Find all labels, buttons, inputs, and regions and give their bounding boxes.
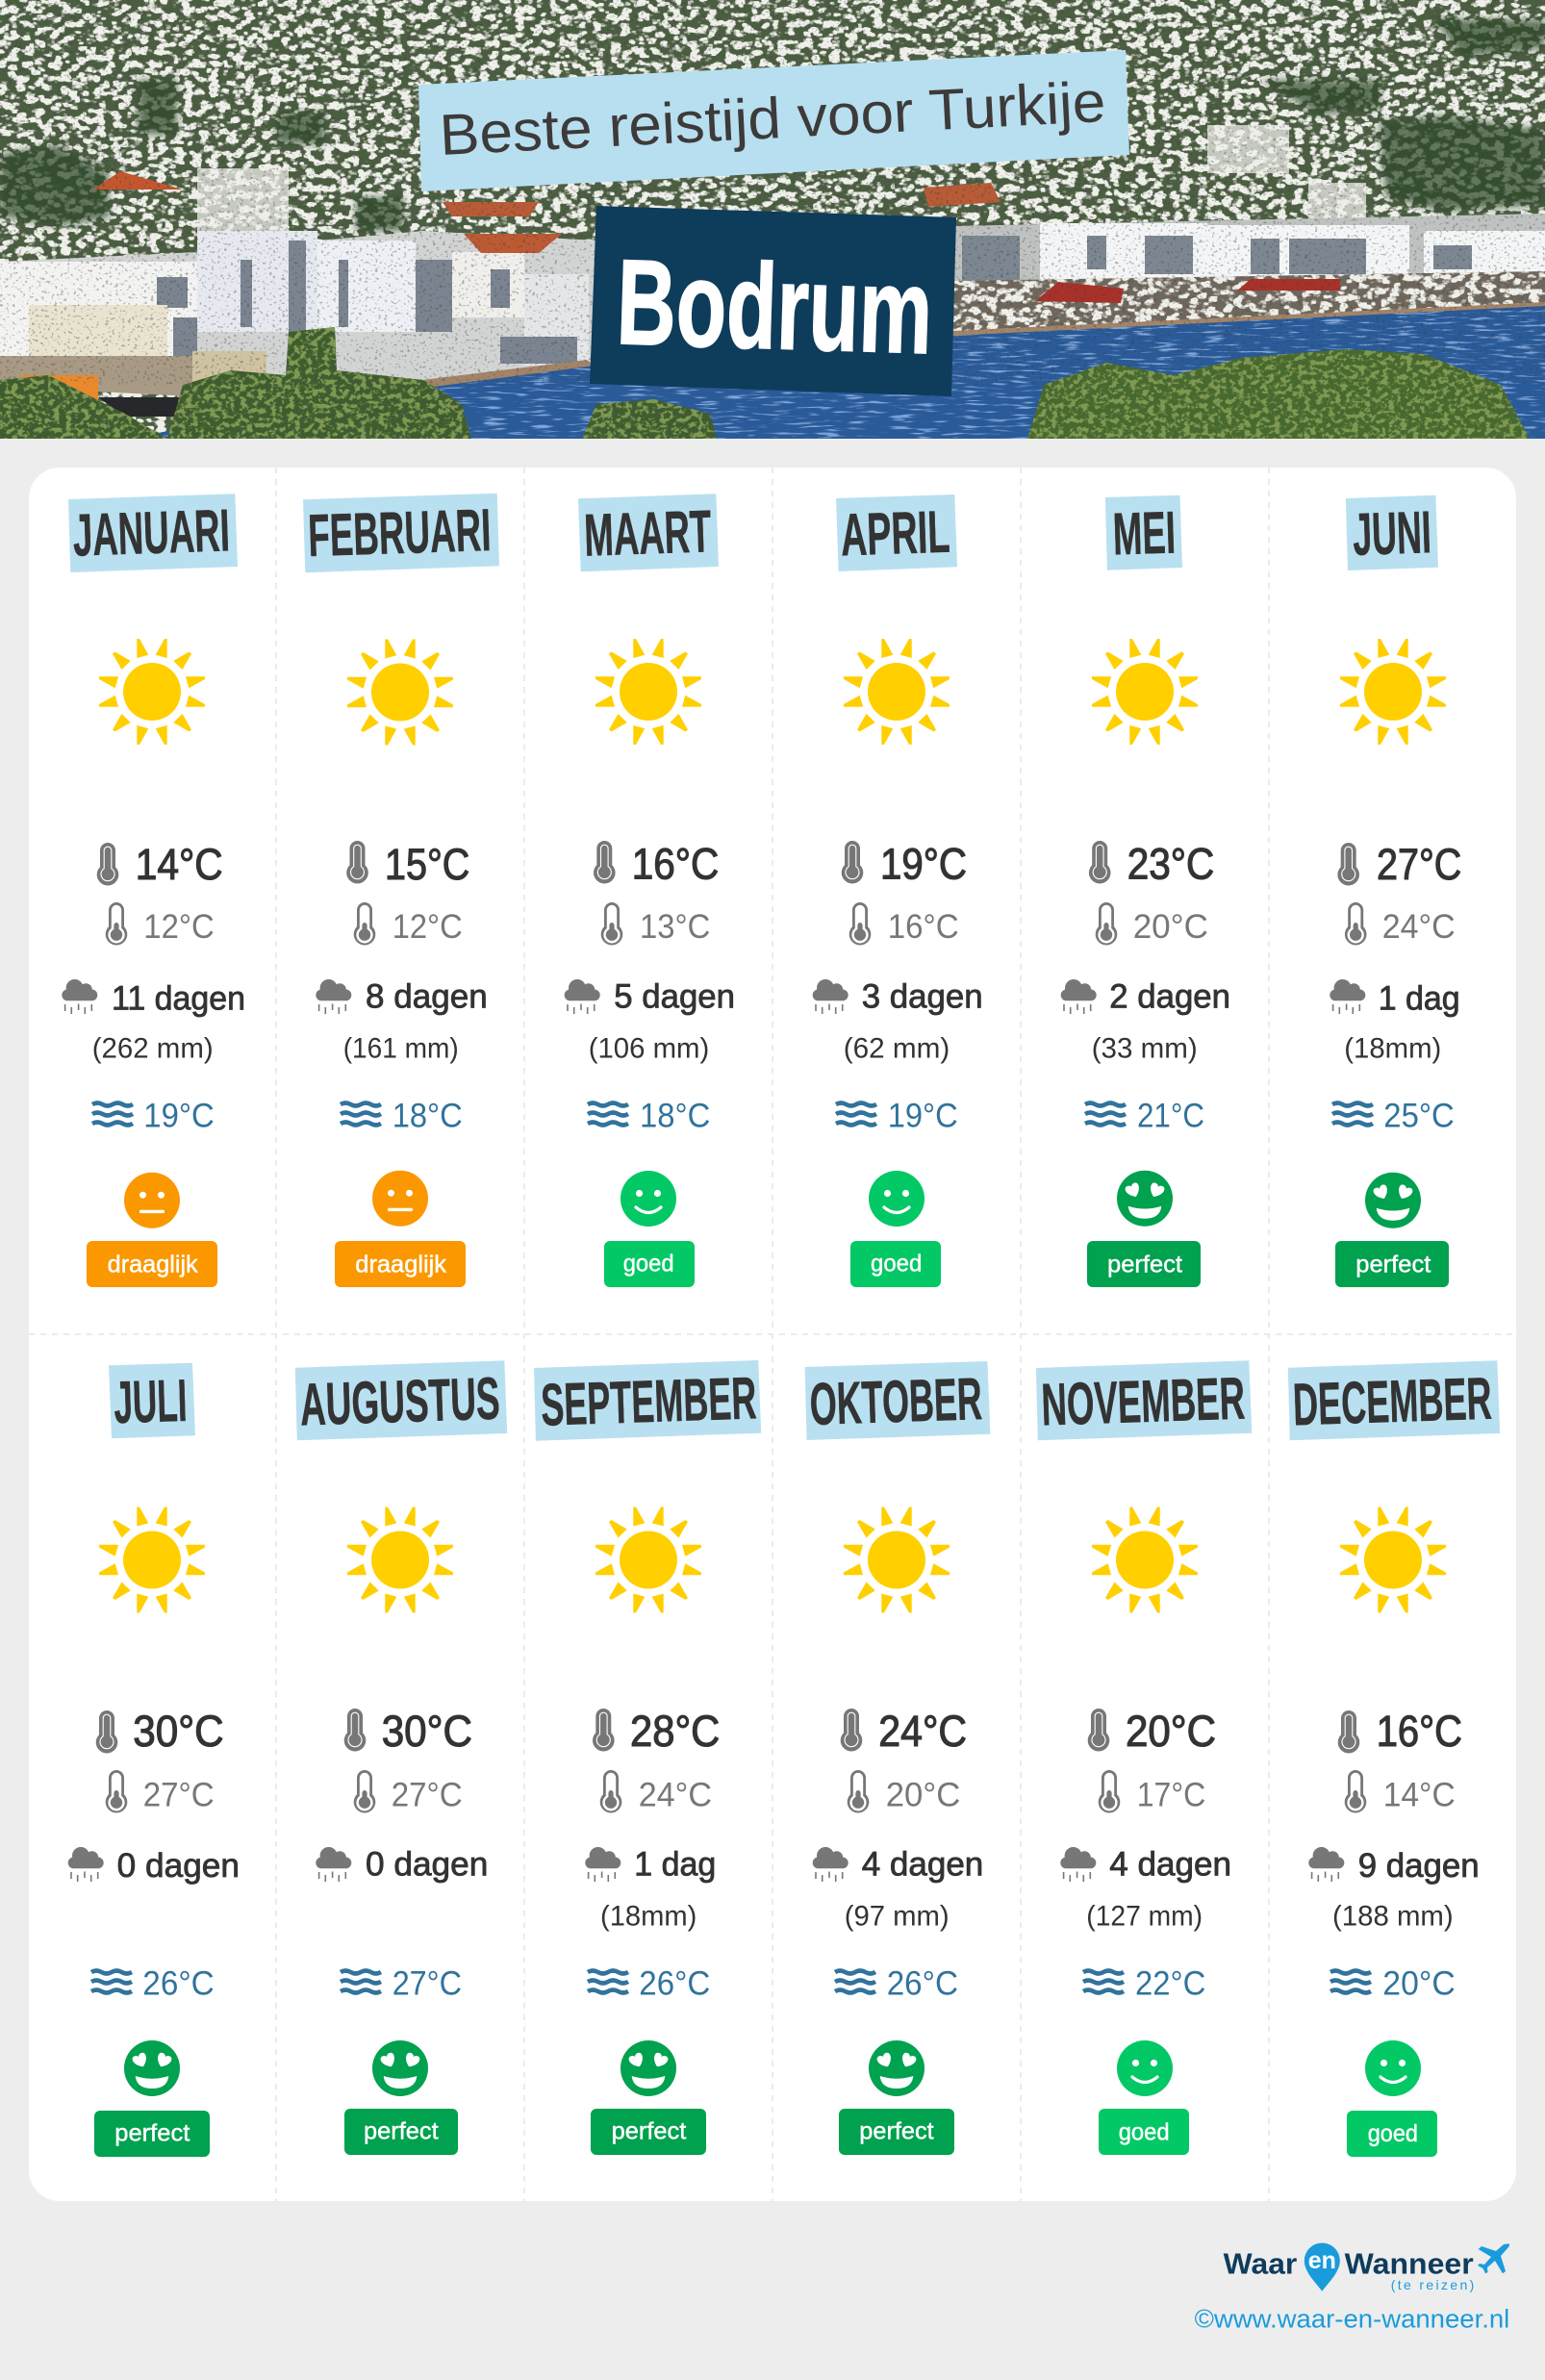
rating badge: goed (871, 1251, 922, 1278)
banner: Bodrum (590, 206, 956, 396)
sea temperature: 26°C (142, 1963, 215, 2002)
sea temperature (1085, 1097, 1204, 1135)
month heading (1346, 495, 1438, 570)
max temperature: 28°C (630, 1707, 720, 1756)
month heading: JUNI (1352, 499, 1432, 569)
rating badge (1347, 2111, 1437, 2157)
icon: sun (1340, 639, 1446, 745)
icon: rating face (124, 2040, 180, 2096)
icon: rating face (1117, 2040, 1173, 2096)
max temperature: 24°C (878, 1707, 967, 1756)
sea temperature: 26°C (639, 1963, 710, 2002)
header photo: Bodrum harbour (0, 0, 1545, 439)
rainfall: (97 mm) (845, 1901, 950, 1933)
min temperature (600, 1770, 712, 1813)
month heading (295, 1360, 507, 1440)
max temperature (842, 839, 967, 889)
max temperature (97, 840, 223, 889)
rating badge: goed (623, 1251, 674, 1278)
month: Januari (62, 494, 245, 1287)
min temperature (848, 1770, 960, 1813)
min temperature: 13°C (640, 907, 710, 946)
rain days: 1 dag (634, 1845, 716, 1883)
min temperature: 16°C (888, 907, 959, 946)
sea temperature (341, 1963, 462, 2002)
rain days: 8 dagen (366, 978, 488, 1016)
month heading: SEPTEMBER (540, 1365, 757, 1439)
sea temperature: 18°C (393, 1097, 463, 1135)
rating badge (344, 2109, 458, 2155)
icon: rating face (869, 1171, 924, 1227)
rating badge (839, 2109, 954, 2155)
website credit: ©www.waar-en-wanneer.nl (1195, 2304, 1509, 2333)
icon: rating face (1365, 2040, 1421, 2096)
rating badge: perfect (364, 2117, 439, 2144)
rating badge (94, 2111, 210, 2157)
sea temperature: 18°C (640, 1097, 710, 1135)
month: December (1288, 1360, 1500, 2157)
rainfall: (188 mm) (1332, 1901, 1454, 1933)
min temperature (106, 1770, 215, 1813)
max temperature (96, 1707, 224, 1756)
icon: sun (1340, 1506, 1446, 1612)
rating badge (87, 1241, 217, 1287)
min temperature: 24°C (1382, 907, 1456, 946)
month: Juni (1330, 495, 1461, 1287)
min temperature (354, 902, 463, 946)
rating badge: goed (1368, 2120, 1418, 2147)
sea temperature: 21°C (1137, 1097, 1204, 1135)
month: Februari (303, 494, 499, 1287)
min temperature (1345, 1770, 1456, 1813)
max temperature: 19°C (880, 839, 967, 889)
panel: monthly climate table (29, 468, 1516, 2201)
banner: Beste reistijd voor Turkije: Beste reistijd voor Turkije (438, 69, 1107, 167)
max temperature: 15°C (385, 840, 469, 889)
rating badge (1099, 2109, 1189, 2155)
month: September (534, 1360, 761, 2155)
icon: rating face (869, 2040, 924, 2096)
month heading: JULI (113, 1368, 188, 1436)
sea temperature (341, 1097, 463, 1135)
min temperature (354, 1770, 463, 1813)
min temperature: 12°C (143, 907, 215, 946)
month heading (578, 494, 719, 571)
icon: airplane (1478, 2243, 1509, 2273)
icon: rating face (372, 1171, 428, 1227)
rainfall: (33 mm) (1092, 1032, 1198, 1064)
rating badge: perfect (859, 2117, 934, 2144)
sea temperature (91, 1963, 215, 2002)
logo word: Wanneer: Wanneer (1345, 2246, 1474, 2280)
sea temperature (588, 1963, 710, 2002)
min temperature (106, 902, 215, 946)
rating badge (1087, 1241, 1201, 1287)
month heading (1105, 495, 1182, 570)
icon: sun (347, 639, 453, 745)
icon: sun (347, 1506, 453, 1612)
month heading: MEI (1112, 500, 1177, 568)
icon: sun (595, 1506, 701, 1612)
icon: map pin with en (1304, 2243, 1340, 2291)
max temperature: 20°C (1126, 1707, 1216, 1756)
rainfall: (127 mm) (1086, 1901, 1203, 1933)
month: November (1036, 1360, 1252, 2155)
sea temperature: 22°C (1135, 1963, 1205, 2002)
sea temperature (1330, 1963, 1456, 2002)
rainfall: (18mm) (600, 1901, 697, 1933)
min temperature: 20°C (886, 1775, 960, 1813)
max temperature (346, 840, 469, 889)
rainfall: (18mm) (1344, 1032, 1441, 1064)
icon: sun (1092, 1506, 1198, 1612)
sea temperature (588, 1097, 710, 1135)
min temperature: 27°C (392, 1775, 463, 1813)
logo: Waar en Wanneer (1195, 2243, 1509, 2333)
sea temperature: 26°C (887, 1963, 958, 2002)
max temperature: 14°C (136, 840, 223, 889)
min temperature (849, 902, 959, 946)
sea temperature: 20°C (1382, 1963, 1456, 2002)
icon: rating face (124, 1173, 180, 1228)
month: Mei (1061, 495, 1230, 1287)
icon: rating face (372, 2040, 428, 2096)
banner: Bodrum: Bodrum (615, 234, 934, 379)
max temperature: 30°C (133, 1707, 224, 1756)
rain days: 3 dagen (862, 978, 983, 1016)
sea temperature (1332, 1097, 1455, 1135)
sea temperature (1083, 1963, 1205, 2002)
max temperature: 27°C (1377, 840, 1461, 889)
icon: rating face (621, 1171, 676, 1227)
sea temperature (836, 1097, 958, 1135)
rating badge: perfect (1107, 1251, 1182, 1278)
rating badge: draaglijk (108, 1251, 198, 1278)
icon: map pin with en: en (1308, 2247, 1336, 2274)
sea temperature: 25°C (1383, 1097, 1455, 1135)
month heading (1036, 1360, 1252, 1440)
sea temperature: 27°C (393, 1963, 462, 2002)
icon: sun (844, 639, 950, 745)
sea temperature (92, 1097, 215, 1135)
rain days: 4 dagen (1109, 1845, 1231, 1883)
month: Maart (565, 494, 735, 1287)
rain days: 0 dagen (366, 1845, 488, 1883)
rating badge (591, 2109, 706, 2155)
month: Oktober (805, 1361, 990, 2155)
rating badge: perfect (1355, 1251, 1431, 1278)
min temperature (1096, 902, 1208, 946)
month heading: AUGUSTUS (299, 1366, 501, 1438)
month heading (836, 494, 957, 571)
rating badge (335, 1241, 466, 1287)
month heading: FEBRUARI (307, 497, 492, 570)
month: Augustus (295, 1360, 507, 2155)
rating badge (1335, 1241, 1449, 1287)
min temperature (1345, 902, 1456, 946)
rainfall: (262 mm) (92, 1032, 214, 1064)
max temperature (1088, 1707, 1216, 1756)
rainfall: (161 mm) (343, 1032, 459, 1064)
banner: Beste reistijd voor Turkije (418, 50, 1129, 191)
rating badge: draaglijk (355, 1251, 447, 1278)
min temperature: 12°C (393, 907, 463, 946)
icon: sun (844, 1506, 950, 1612)
month heading (68, 494, 238, 572)
min temperature: 24°C (639, 1775, 712, 1813)
max temperature (593, 1707, 720, 1756)
month heading: NOVEMBER (1040, 1366, 1246, 1439)
max temperature (1089, 839, 1214, 889)
min temperature: 17°C (1137, 1775, 1205, 1813)
max temperature: 16°C (1377, 1707, 1462, 1756)
max temperature (841, 1707, 967, 1756)
month heading (534, 1360, 761, 1441)
rainfall: (106 mm) (589, 1032, 709, 1064)
min temperature (601, 902, 710, 946)
rainfall: (62 mm) (844, 1032, 950, 1064)
month: Juli (68, 1363, 240, 2157)
rain days: 9 dagen (1358, 1847, 1480, 1885)
icon: rating face (621, 2040, 676, 2096)
month heading: APRIL (840, 499, 950, 569)
sea temperature: 19°C (143, 1097, 215, 1135)
max temperature: 30°C (382, 1707, 472, 1756)
rain days: 1 dag (1379, 979, 1460, 1017)
icon: sun (1092, 639, 1198, 745)
max temperature: 16°C (632, 839, 719, 889)
sea temperature (835, 1963, 958, 2002)
max temperature (594, 839, 719, 889)
month heading (303, 494, 499, 572)
max temperature: 23°C (1127, 839, 1214, 889)
logo word: Waar: Waar (1224, 2246, 1297, 2280)
month heading: OKTOBER (809, 1366, 983, 1438)
rain days: 5 dagen (614, 978, 735, 1016)
min temperature (1099, 1770, 1205, 1813)
month: April (813, 494, 983, 1287)
min temperature: 14°C (1383, 1775, 1456, 1813)
rain days: 0 dagen (117, 1847, 240, 1885)
rating badge: goed (1119, 2118, 1170, 2145)
icon: sun (99, 639, 205, 745)
icon: sun (99, 1506, 205, 1612)
month heading (805, 1361, 990, 1440)
icon: sun (595, 639, 701, 745)
logo tagline: (te reizen) (1391, 2277, 1474, 2292)
month heading: MAART (583, 498, 713, 570)
month heading (109, 1363, 195, 1438)
max temperature (344, 1707, 472, 1756)
max temperature (1338, 1707, 1462, 1756)
rain days: 2 dagen (1109, 978, 1230, 1016)
sea temperature: 19°C (888, 1097, 958, 1135)
rating badge (604, 1241, 695, 1287)
rain days (1330, 979, 1460, 1017)
rain days: 4 dagen (862, 1845, 983, 1883)
rain days (585, 1845, 716, 1883)
max temperature (1337, 840, 1461, 889)
rating badge: perfect (612, 2117, 686, 2144)
icon: rating face (1117, 1171, 1173, 1227)
rain days: 11 dagen (112, 979, 245, 1017)
rating badge (850, 1241, 941, 1287)
icon: rating face (1365, 1173, 1421, 1228)
month heading: JANUARI (72, 497, 231, 570)
min temperature: 20°C (1133, 907, 1208, 946)
rating badge: perfect (114, 2120, 190, 2147)
min temperature: 27°C (143, 1775, 215, 1813)
